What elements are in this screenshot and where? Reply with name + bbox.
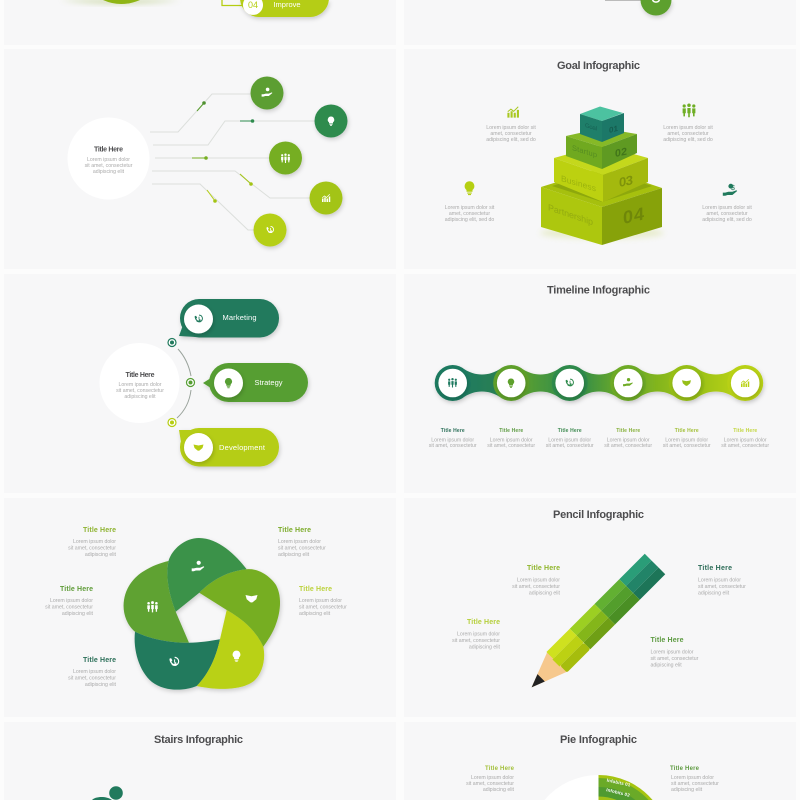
label: left: sit amet, consectetur (466, 781, 514, 787)
petal: left people (124, 561, 189, 643)
node: hand (250, 76, 284, 110)
timeline labels (429, 428, 769, 449)
panel: pencil infographic (452, 509, 746, 698)
timeline labels: Title Here (441, 428, 465, 434)
note: hand: $ (731, 185, 735, 192)
heading: Timeline Infographic (547, 284, 650, 296)
note: bulb: amet, consectetur (449, 211, 490, 217)
layer 04 partnership: Partnership (548, 202, 593, 227)
label: lower right (650, 637, 699, 668)
note: people: amet, consectetur (667, 131, 709, 137)
ellipse base fragment (60, 0, 180, 4)
label: lower right: sit amet, consectetur (650, 656, 699, 662)
label: upper left: adipiscing elit (529, 590, 561, 596)
label: left (466, 766, 515, 793)
timeline labels: Lorem ipsum dolor (548, 438, 591, 444)
timeline icons (448, 378, 749, 388)
pill: development (179, 428, 279, 466)
connector nodes (168, 338, 194, 426)
layer 01 goal cube: Goal (585, 122, 597, 133)
layer 03 business: Business (561, 173, 597, 194)
pill: strategy: Strategy (254, 378, 283, 387)
label: lower left: sit amet, consectetur (452, 638, 500, 644)
panel: petal cycle diagram (45, 527, 347, 690)
label: top left: sit amet, consectetur (68, 546, 116, 552)
panel: cropped top right slide (605, 0, 672, 16)
note: chart: amet, consectetur (490, 131, 532, 137)
panel: speech pills diagram (100, 299, 308, 466)
timeline labels: sit amet, consectetur (721, 443, 769, 449)
note: hand: Lorem ipsum dolor sit (702, 205, 752, 211)
center circle: Lorem ipsum dolor (119, 382, 162, 388)
layer 02 startup: Startup (572, 143, 597, 159)
label: top left: Lorem ipsum dolor (73, 539, 116, 545)
timeline labels: Title Here (499, 428, 523, 434)
label: top right: sit amet, consectetur (278, 546, 326, 552)
timeline labels: Title Here (675, 428, 699, 434)
label: bottom left: Lorem ipsum dolor (73, 669, 116, 675)
label: left: Title Here (485, 766, 515, 772)
center circle: sit amet, consectetur (85, 163, 133, 169)
label: lower left: Lorem ipsum dolor (457, 632, 500, 638)
panel: goal infographic (445, 60, 752, 245)
note: chart: adipiscing elit, sed do (486, 137, 536, 143)
label: upper left: sit amet, consectetur (512, 584, 560, 590)
label: top right: adipiscing elit (278, 552, 310, 558)
petal: bottom-left phone (135, 632, 220, 690)
label: right: sit amet, consectetur (671, 781, 719, 787)
node: chart (310, 182, 342, 214)
note: bulb: Lorem ipsum dolor sit (445, 205, 495, 211)
chain (435, 365, 763, 401)
label: lower left (452, 619, 501, 650)
center circle: Title Here (126, 372, 155, 379)
petal: top hand (167, 538, 247, 612)
layer 01 goal cube (580, 106, 624, 142)
label: top right (278, 527, 326, 558)
label: middle right: Lorem ipsum dolor (299, 598, 342, 604)
pill: marketing: Marketing (222, 313, 256, 322)
center circle (100, 343, 180, 423)
label: middle right: adipiscing elit (299, 611, 331, 617)
timeline labels: Lorem ipsum dolor (665, 438, 708, 444)
label: right: Title Here (670, 766, 700, 772)
label: lower left: Title Here (467, 619, 500, 626)
note: hand (702, 184, 752, 223)
label: top right: Title Here (278, 527, 311, 534)
timeline labels: Lorem ipsum dolor (490, 438, 533, 444)
pie chart: Infobits 02 (606, 787, 631, 798)
pie chart: Infobits 01 (606, 778, 631, 788)
connector lines (150, 94, 316, 230)
note: people (663, 103, 713, 143)
note: chart (486, 106, 536, 143)
label: upper right: sit amet, consectetur (698, 584, 746, 590)
label: bottom left (68, 657, 117, 688)
label: upper right: adipiscing elit (698, 590, 730, 596)
label: middle left: sit amet, consectetur (45, 604, 93, 610)
label: lower right: adipiscing elit (650, 662, 682, 668)
label: top left (68, 527, 117, 558)
connector fragment (222, 0, 242, 6)
note: hand: amet, consectetur (706, 211, 748, 217)
label: upper left: Title Here (527, 565, 560, 572)
label: middle right (299, 586, 347, 617)
label: middle left: adipiscing elit (62, 611, 94, 617)
timeline labels: Lorem ipsum dolor (607, 438, 650, 444)
label: right: Lorem ipsum dolor (671, 775, 714, 781)
note: hand: adipiscing elit, sed do (702, 217, 752, 223)
pencil (521, 554, 665, 698)
heading: Goal Infographic (557, 60, 640, 72)
label: right (670, 766, 719, 793)
center circle (68, 118, 150, 200)
petals (124, 538, 280, 690)
timeline labels: sit amet, consectetur (546, 443, 594, 449)
label: upper right: Lorem ipsum dolor (698, 578, 741, 584)
pie chart (544, 775, 653, 800)
goal icons and notes (445, 103, 752, 223)
layer 04 partnership: 04 (623, 203, 645, 228)
label: lower right: Title Here (650, 637, 684, 644)
label: upper right (698, 565, 746, 596)
timeline labels: Title Here (733, 428, 757, 434)
label: bottom left: adipiscing elit (85, 682, 117, 688)
layer 02 startup: 02 (615, 146, 627, 160)
label: top left: Title Here (83, 527, 116, 534)
center circle: Lorem ipsum dolor (87, 157, 130, 163)
improve pill (240, 0, 329, 17)
icon circle fragment (640, 0, 672, 16)
improve pill: Improve (273, 0, 301, 9)
improve pill: 04 (248, 0, 258, 10)
petal: bottom-right bulb (197, 610, 264, 689)
pill: strategy (203, 363, 308, 402)
center circle: adipiscing elit (93, 169, 125, 175)
label: middle left (45, 586, 94, 617)
center circle: sit amet, consectetur (116, 388, 164, 394)
pill: marketing (179, 299, 279, 338)
petal: right handshake (199, 569, 280, 647)
panel: timeline infographic (429, 284, 769, 449)
heading: Pencil Infographic (553, 509, 644, 521)
label: bottom left: sit amet, consectetur (68, 676, 116, 682)
label: left: adipiscing elit (483, 787, 515, 793)
layer 03 business: 03 (619, 172, 633, 190)
layer 02 startup (566, 128, 637, 169)
stacked pyramid (540, 106, 664, 245)
label: middle left: Title Here (60, 586, 93, 593)
label: lower left: adipiscing elit (469, 644, 501, 650)
label: middle right: sit amet, consectetur (299, 604, 347, 610)
pill: development: Development (219, 443, 266, 452)
panel: radial connector diagram (68, 76, 348, 246)
heading: Pie Infographic (560, 734, 637, 746)
label: middle left: Lorem ipsum dolor (50, 598, 93, 604)
label: lower right: Lorem ipsum dolor (650, 650, 694, 656)
layer 03 business (554, 145, 648, 202)
node: phone (254, 214, 286, 246)
note: people: Lorem ipsum dolor sit (663, 125, 713, 131)
center circle: adipiscing elit (124, 394, 156, 400)
label: top right: Lorem ipsum dolor (278, 539, 321, 545)
note: bulb (445, 181, 495, 223)
panel: pie infographic (466, 734, 719, 800)
label: left: Lorem ipsum dolor (471, 775, 514, 781)
note: people: adipiscing elit, sed do (663, 137, 713, 143)
connector arcs (177, 349, 191, 418)
label: top left: adipiscing elit (85, 552, 117, 558)
petal icons (147, 561, 258, 666)
timeline labels: sit amet, consectetur (429, 443, 477, 449)
timeline labels: sit amet, consectetur (663, 443, 711, 449)
label: right: adipiscing elit (671, 787, 703, 793)
timeline labels: Title Here (558, 428, 582, 434)
layer 01 goal cube: 01 (609, 124, 618, 135)
label: bottom left: Title Here (83, 657, 116, 664)
layer 04 partnership (541, 168, 662, 245)
node: people (269, 142, 302, 174)
timeline labels: sit amet, consectetur (604, 443, 652, 449)
label: upper left (512, 565, 561, 596)
panel: stairs infographic (92, 734, 243, 800)
timeline labels: Lorem ipsum dolor (724, 438, 767, 444)
heading: Stairs Infographic (154, 734, 243, 746)
timeline labels: Title Here (616, 428, 640, 434)
climbing figure (92, 786, 123, 800)
label: middle right: Title Here (299, 586, 332, 593)
note: bulb: adipiscing elit, sed do (445, 217, 494, 223)
connector markers (192, 101, 254, 203)
label: upper left: Lorem ipsum dolor (517, 578, 560, 584)
center circle: Title Here (94, 146, 123, 154)
timeline labels: sit amet, consectetur (487, 443, 535, 449)
note: chart: Lorem ipsum dolor sit (486, 125, 536, 131)
timeline labels: Lorem ipsum dolor (431, 438, 474, 444)
node: bulb (314, 104, 348, 138)
panel: cropped top left slide (60, 0, 329, 17)
label: upper right: Title Here (698, 565, 732, 572)
